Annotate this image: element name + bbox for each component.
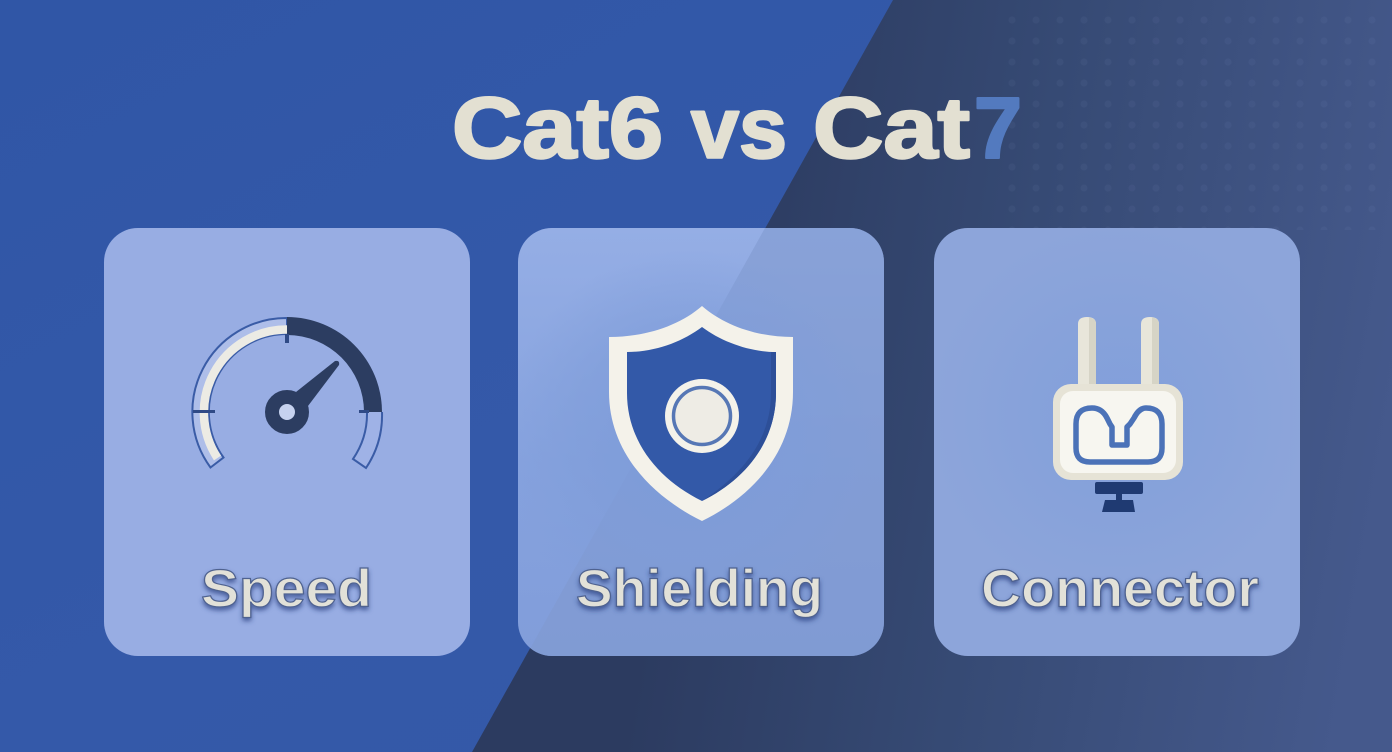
icon: shield <box>609 306 793 521</box>
title: vs <box>691 80 787 176</box>
icon: speedometer gauge <box>192 317 382 468</box>
shield centre circle <box>665 379 739 453</box>
label: shielding: Shielding <box>576 560 823 618</box>
title: Cat <box>813 80 970 176</box>
label: connector: Connector <box>981 560 1259 618</box>
panel: shielding <box>518 228 884 656</box>
label: speed: Speed <box>201 560 372 618</box>
background: dark diagonal panel <box>472 0 1392 752</box>
connector base <box>1095 482 1143 512</box>
panel: connector <box>934 228 1300 656</box>
panel: speed <box>104 228 470 656</box>
title <box>452 80 1022 176</box>
gauge needle <box>296 361 339 406</box>
icon: connector plug <box>1053 317 1183 512</box>
title: 7 <box>974 80 1022 176</box>
gauge hub <box>272 397 302 427</box>
title: Cat6 <box>452 80 663 176</box>
